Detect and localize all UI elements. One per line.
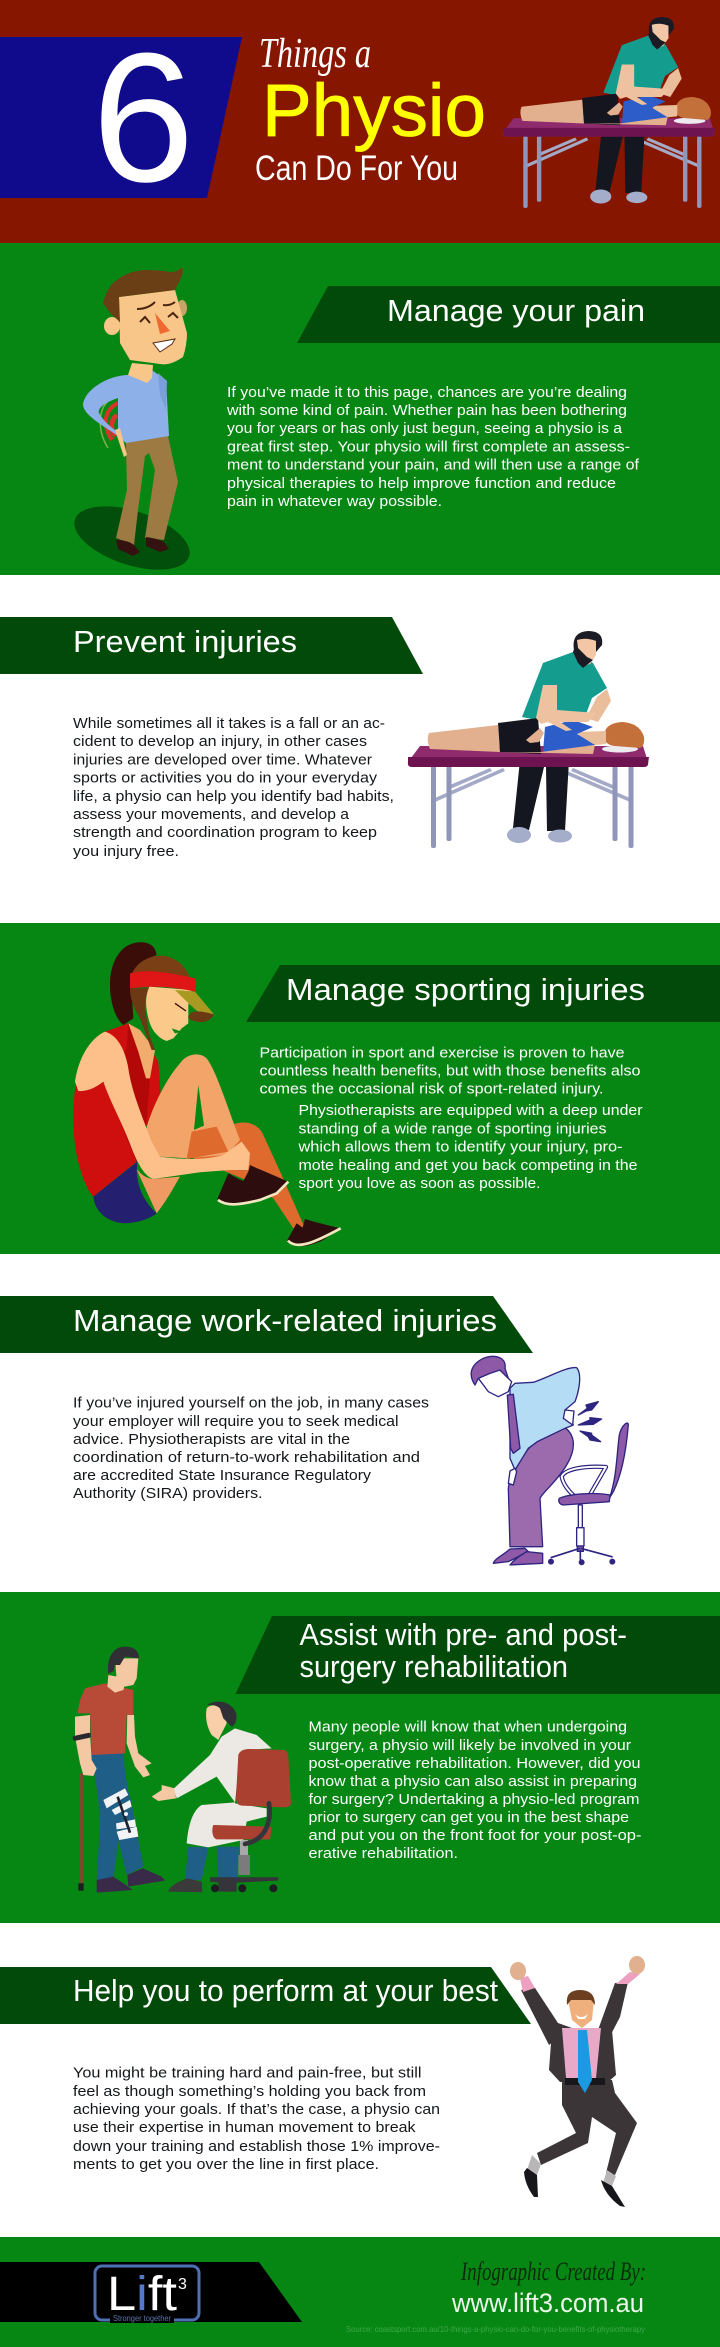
black logo banner bbox=[0, 2262, 302, 2322]
text block: surgery rehabilitation: surgery, a physio will likely be involved in your bbox=[308, 1737, 631, 1754]
large number 6: 6 bbox=[92, 14, 194, 220]
text block: manage your pain: pain in whatever way possible. bbox=[227, 493, 442, 510]
source line: Source: coastsport.com.au/10-things-a-physio-can-do-for-you-benefits-of-physiotherapy bbox=[346, 2324, 646, 2334]
text block: perform at your best bbox=[73, 2065, 440, 2173]
text block: manage your pain: physical therapies to help improve function and reduce bbox=[227, 475, 616, 492]
logo: Lift3 bbox=[95, 2266, 199, 2323]
text block: prevent injuries: strength and coordination program to keep bbox=[73, 824, 377, 841]
title line: Physio: Physio bbox=[262, 69, 486, 152]
text block: sport physiotherapists: Physiotherapists are equipped with a deep under bbox=[298, 1102, 643, 1119]
text block: sport benefits bbox=[260, 1044, 640, 1098]
illustration: patient with crutch bbox=[72, 1647, 165, 1893]
text block: surgery rehabilitation: for surgery? Undertaking a physio-led program bbox=[308, 1791, 640, 1808]
illustration: therapist at massage table bbox=[408, 631, 649, 848]
text block: surgery rehabilitation: prior to surgery can get you in the best shape bbox=[308, 1809, 629, 1826]
title line: Can Do For You: Can Do For You bbox=[255, 149, 458, 188]
text block: surgery rehabilitation bbox=[308, 1719, 642, 1862]
text block: surgery rehabilitation: and put you on the front foot for your post-op- bbox=[308, 1827, 642, 1844]
text block: manage your pain: If you’ve made it to this page, chances are you’re dealing bbox=[227, 384, 627, 401]
text block: prevent injuries: cident to develop an injury, in other cases bbox=[73, 733, 367, 750]
credit: Infographic Created By: Infographic Created By: bbox=[460, 2257, 646, 2286]
text block: prevent injuries: life, a physio can help you identify bad habits, bbox=[73, 788, 394, 805]
text block: manage your pain bbox=[226, 384, 640, 510]
text block: sport physiotherapists bbox=[297, 1102, 643, 1192]
logo: Lift3: Lift bbox=[107, 2268, 177, 2321]
illustration: therapist at massage table bbox=[503, 17, 715, 208]
text block: work-related injuries: your employer will require you to seek medical bbox=[73, 1413, 399, 1430]
text block: perform at your best: achieving your goals. If that’s the case, a physio can bbox=[73, 2101, 440, 2118]
logo: Lift3: Stronger together bbox=[113, 2314, 171, 2323]
text block: prevent injuries: sports or activities you do in your everyday bbox=[73, 770, 378, 786]
text block: sport benefits: countless health benefits, but with those benefits also bbox=[260, 1063, 640, 1080]
text block: surgery rehabilitation: Many people will know that when undergoing bbox=[308, 1719, 627, 1736]
heading banner: work-related injuries: Manage work-related injuries bbox=[73, 1303, 497, 1338]
heading banner: perform at your best bbox=[0, 1967, 531, 2024]
illustration: jumping businessman bbox=[510, 1956, 645, 2207]
text block: manage your pain: great first step. Your physio will first complete an assess- bbox=[227, 438, 630, 456]
illustration: injured runner bbox=[73, 942, 341, 1246]
heading banner: manage your pain bbox=[297, 286, 720, 343]
panel: pre- and post-surgery rehabilitation bbox=[0, 1592, 720, 1923]
website url: www.lift3.com.au bbox=[451, 2288, 644, 2318]
logo: Lift3: 3 bbox=[178, 2276, 187, 2293]
panel: manage work-related injuries bbox=[0, 1254, 720, 1592]
text block: perform at your best: use their expertise in human movement to break bbox=[73, 2119, 416, 2136]
text block: perform at your best: feel as though something’s holding you back from bbox=[73, 2083, 426, 2100]
text block: prevent injuries bbox=[73, 715, 394, 860]
text block: surgery rehabilitation: erative rehabilitation. bbox=[308, 1845, 458, 1862]
text block: surgery rehabilitation: know that a physio can also assist in preparing bbox=[308, 1773, 637, 1790]
heading banner: prevent injuries bbox=[0, 617, 423, 674]
text block: manage your pain: with some kind of pain. Whether pain has been bothering bbox=[226, 402, 627, 419]
text block: work-related injuries: are accredited State Insurance Regulatory bbox=[73, 1467, 372, 1484]
text block: perform at your best: You might be training hard and pain-free, but still bbox=[73, 2065, 422, 2082]
heading banner: manage sporting injuries bbox=[246, 965, 720, 1022]
heading banner: manage sporting injuries: Manage sporting injuries bbox=[286, 972, 645, 1007]
text block: work-related injuries bbox=[73, 1395, 429, 1502]
panel: perform at your best bbox=[0, 1923, 720, 2237]
panel: prevent injuries bbox=[0, 575, 720, 923]
illustration: doctor seated on chair bbox=[152, 1702, 291, 1892]
text block: work-related injuries: advice. Physiotherapists are vital in the bbox=[73, 1431, 350, 1448]
text block: manage your pain: ment to understand your pain, and will then use a range of bbox=[227, 456, 640, 474]
text block: sport benefits: Participation in sport and exercise is proven to have bbox=[260, 1044, 624, 1062]
text block: surgery rehabilitation: post-operative rehabilitation. However, did you bbox=[308, 1755, 640, 1772]
panel: manage sporting injuries bbox=[0, 923, 720, 1254]
text block: sport physiotherapists: standing of a wide range of sporting injuries bbox=[298, 1120, 606, 1138]
heading banner: work-related injuries bbox=[0, 1296, 533, 1353]
text block: sport physiotherapists: sport you love as soon as possible. bbox=[298, 1175, 540, 1192]
panel: footer bbox=[0, 2237, 720, 2347]
blue number banner bbox=[0, 37, 242, 198]
heading banner: prevent injuries: Prevent injuries bbox=[73, 624, 297, 659]
text block: prevent injuries: injuries are developed over time. Whatever bbox=[73, 752, 372, 768]
text block: sport physiotherapists: which allows them to identify your injury, pro- bbox=[297, 1139, 623, 1156]
panel: manage your pain bbox=[0, 243, 720, 582]
text block: work-related injuries: coordination of return-to-work rehabilitation and bbox=[73, 1449, 420, 1466]
text block: perform at your best: ments to get you over the line in first place. bbox=[73, 2156, 379, 2173]
text block: manage your pain: you for years or has only just begun, seeing a physio is a bbox=[227, 420, 623, 437]
heading banner: surgery rehabilitation: Assist with pre- and post- bbox=[300, 1617, 627, 1652]
title line: Things a: Things a bbox=[259, 31, 371, 77]
text block: prevent injuries: While sometimes all it takes is a fall or an ac- bbox=[73, 715, 385, 732]
heading banner: manage your pain: Manage your pain bbox=[387, 293, 645, 328]
illustration: worker with back pain and office chair bbox=[471, 1356, 628, 1565]
text block: perform at your best: down your training and establish those 1% improve- bbox=[73, 2138, 440, 2155]
text block: prevent injuries: you injury free. bbox=[73, 843, 179, 860]
heading banner: surgery rehabilitation bbox=[236, 1616, 720, 1694]
text block: work-related injuries: Authority (SIRA) providers. bbox=[73, 1485, 262, 1502]
heading banner: perform at your best: Help you to perform at your best bbox=[73, 1973, 498, 2008]
illustration: man in back pain bbox=[67, 267, 197, 582]
panel: header bbox=[0, 0, 720, 243]
heading banner: surgery rehabilitation: surgery rehabilitation bbox=[300, 1649, 568, 1684]
text block: prevent injuries: assess your movements, and develop a bbox=[73, 806, 350, 823]
text block: sport physiotherapists: mote healing and get you back competing in the bbox=[298, 1157, 638, 1174]
text block: sport benefits: comes the occasional risk of sport-related injury. bbox=[260, 1081, 604, 1098]
text block: work-related injuries: If you’ve injured yourself on the job, in many cases bbox=[73, 1395, 429, 1412]
